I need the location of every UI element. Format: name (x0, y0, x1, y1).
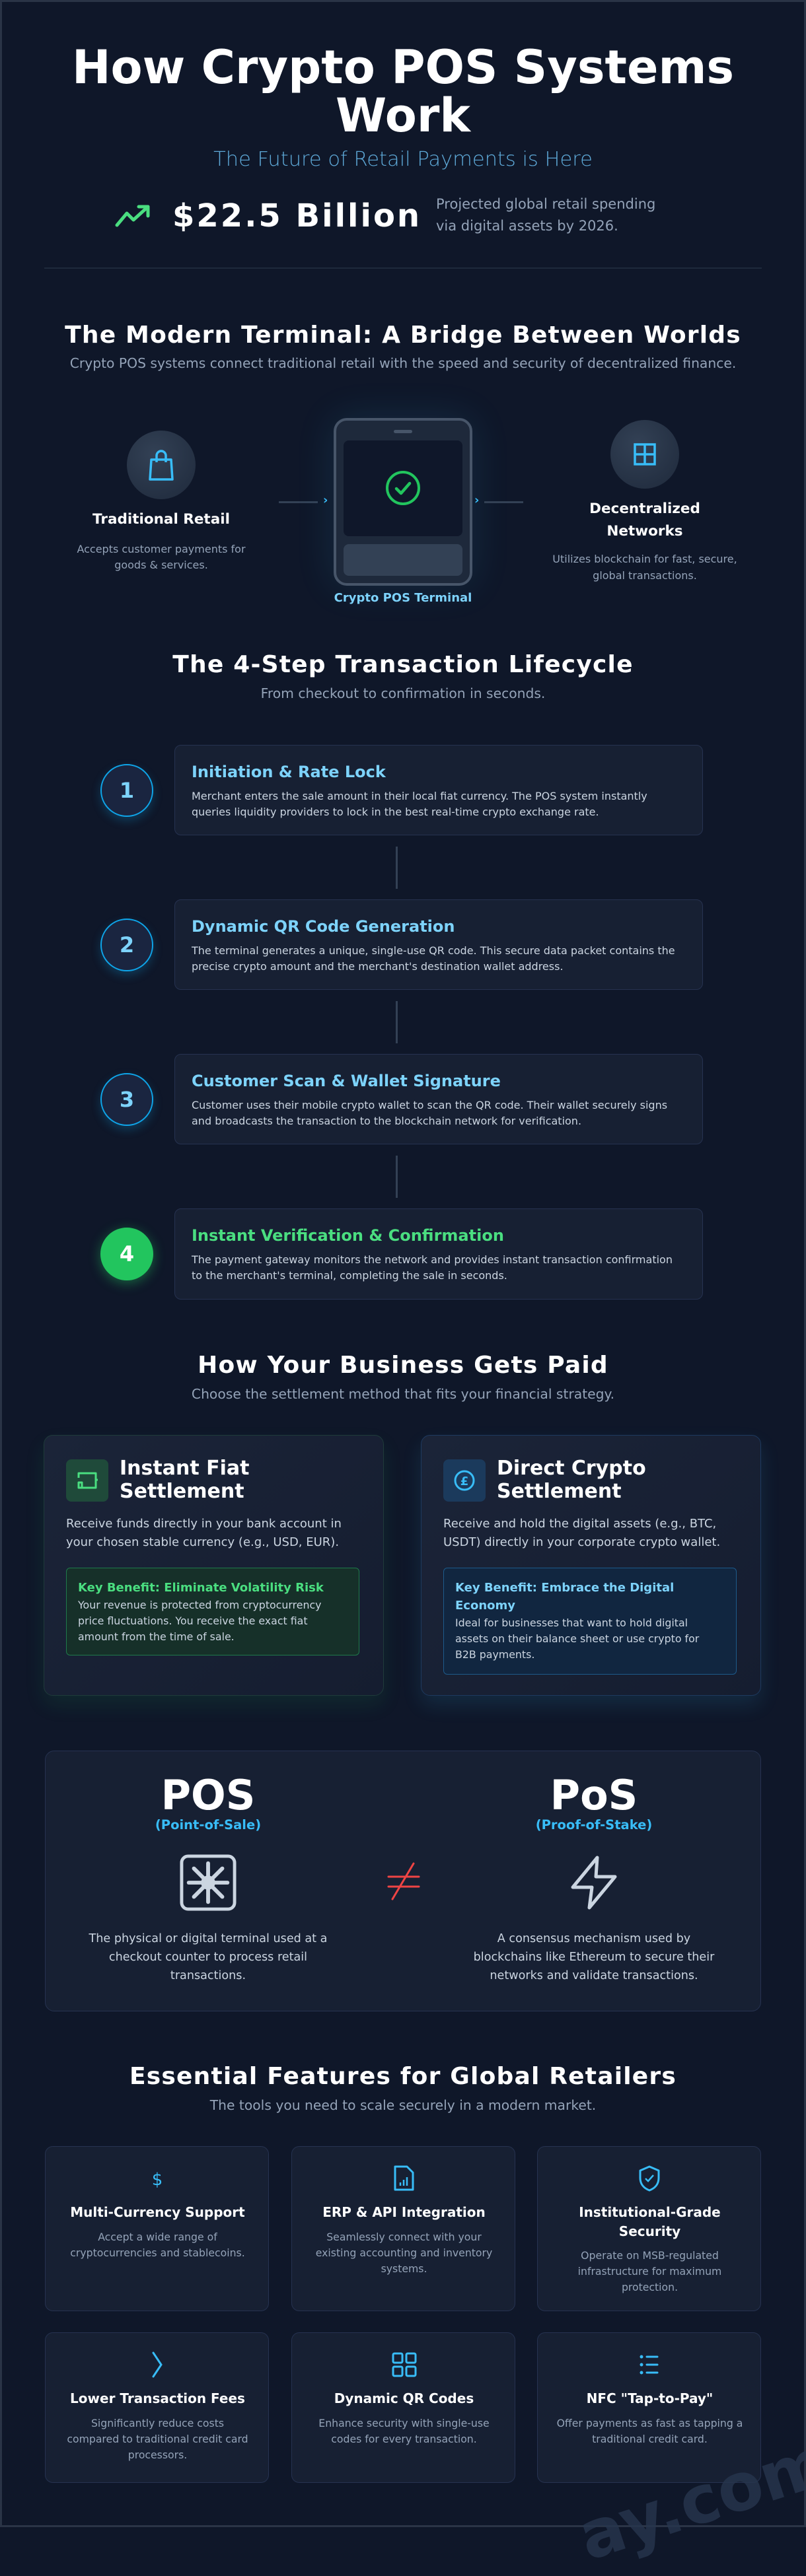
step card (174, 1054, 703, 1144)
description: Accepts customer payments for (77, 543, 246, 555)
heading: features: Essential Features for Global Retailers (129, 2063, 677, 2090)
PoS column: PoS (550, 1771, 638, 1819)
panel: POS vs PoS (45, 1751, 761, 2011)
panel: traditional retail (77, 431, 246, 571)
not equal sign (387, 1862, 420, 1900)
feature: multi-currency: Accept a wide range of cryptocurrencies and stablecoins. (70, 2231, 245, 2259)
stat description: via digital assets by 2026. (436, 218, 618, 234)
number badge: 1 (120, 778, 134, 803)
step card: Initiation & Rate Lock (192, 763, 386, 781)
label: Decentralized (589, 501, 700, 517)
description: global transactions. (593, 569, 697, 582)
card title: Instant Fiat (120, 1457, 249, 1480)
subheading: Crypto POS systems connect traditional retail with the speed and security of decentralized finance. (70, 355, 736, 371)
description: Utilizes blockchain for fast, secure, (552, 553, 737, 565)
feature: ERP & API: ERP & API Integration (322, 2204, 486, 2220)
feature: dynamic QR: Enhance security with single-use codes for every transaction. (318, 2417, 490, 2445)
key benefit (443, 1568, 737, 1675)
feature: NFC: Offer payments as fast as tapping a traditional credit card. (557, 2417, 743, 2445)
feature: multi-currency (45, 2146, 269, 2311)
subtitle: The Future of Retail Payments is Here (213, 148, 593, 171)
label (589, 501, 700, 540)
POS column: POS (161, 1771, 255, 1819)
key benefit (66, 1568, 359, 1655)
step card: Merchant enters the sale amount in their local fiat currency. The POS system instantly queries liquidity providers to lock in the best real-time crypto exchange rate. (192, 790, 647, 818)
PoS column: (Proof-of-Stake) (536, 1817, 652, 1832)
terminal label: Crypto POS Terminal (334, 591, 472, 605)
card title: Settlement (497, 1480, 622, 1503)
card text: Receive funds directly in your bank account in your chosen stable currency (e.g., USD, EUR). (66, 1517, 342, 1549)
panel: instant fiat settlement (44, 1435, 384, 1696)
feature: ERP & API (291, 2146, 515, 2311)
icon: lightning (571, 1856, 617, 1910)
feature: lower fees: Lower Transaction Fees (70, 2390, 245, 2406)
heading: modern terminal: The Modern Terminal: A Bridge Between Worlds (65, 322, 741, 349)
icon: pound coin (443, 1459, 486, 1502)
feature: security: Operate on MSB-regulated infrastructure for maximum protection. (578, 2249, 721, 2293)
screen (344, 440, 462, 536)
step 2 (96, 899, 703, 990)
step 1 (96, 745, 703, 835)
feature: security: Security (619, 2223, 680, 2239)
number badge (100, 919, 153, 971)
card title: Direct Crypto (497, 1457, 646, 1480)
panel: direct crypto settlement (421, 1435, 761, 1696)
stat description: Projected global retail spending (436, 196, 655, 212)
POS column: (Point-of-Sale) (155, 1817, 261, 1832)
step card (174, 899, 703, 990)
feature: dynamic QR: Dynamic QR Codes (334, 2390, 474, 2406)
subheading: The tools you need to scale securely in a modern market. (210, 2097, 596, 2113)
icon: pound coin: £ (460, 1475, 468, 1488)
step card: The terminal generates a unique, single-use QR code. This secure data packet contains the precise crypto amount and the merchant's destination wallet address. (192, 944, 675, 973)
POS column (89, 1771, 327, 1982)
number badge: 2 (120, 932, 134, 957)
subheading: Choose the settlement method that fits your financial strategy. (192, 1386, 614, 1402)
feature: NFC (537, 2332, 761, 2483)
card title (120, 1457, 249, 1503)
feature: dynamic QR (291, 2332, 515, 2483)
description (552, 553, 737, 582)
title: How Crypto POS Systems (72, 40, 734, 94)
feature: lower fees: Significantly reduce costs (91, 2417, 224, 2429)
feature: security: Institutional-Grade (579, 2204, 721, 2220)
number badge: 3 (120, 1087, 134, 1112)
icon: terminal chip (180, 1854, 237, 1911)
arrow: left connector: › (323, 493, 328, 507)
title (72, 40, 734, 143)
feature: security (537, 2146, 761, 2311)
POS column: The physical or digital terminal used at a checkout counter to process retail transactions. (89, 1932, 327, 1982)
title: Work (336, 88, 470, 143)
PoS column: A consensus mechanism used by blockchains like Ethereum to secure their networks and validate transactions. (474, 1932, 714, 1982)
step card (174, 745, 703, 835)
card title (497, 1457, 646, 1503)
description (77, 543, 246, 571)
step card: Instant Verification & Confirmation (192, 1226, 504, 1245)
label: Networks (606, 523, 683, 540)
key benefit: Key Benefit: Embrace the Digital Economy (455, 1581, 674, 1613)
feature: lower fees: processors. (128, 2449, 187, 2461)
stat description (436, 196, 655, 234)
key benefit: Your revenue is protected from cryptocurrency price fluctuations. You receive the exact fiat amount from the time of sale. (78, 1599, 322, 1643)
card text: Receive and hold the digital assets (e.g., BTC, USDT) directly in your corporate crypto wallet. (443, 1517, 720, 1549)
step card (174, 1208, 703, 1300)
icon: check (386, 471, 420, 505)
step card: Customer Scan & Wallet Signature (192, 1072, 501, 1090)
feature: multi-currency: Multi-Currency Support (70, 2204, 245, 2220)
label: Traditional Retail (92, 511, 230, 528)
icon: cash (66, 1459, 108, 1502)
PoS column (474, 1771, 715, 1982)
arrow: left connector (279, 493, 328, 507)
terminal device (326, 411, 480, 605)
step card: Customer uses their mobile crypto wallet to scan the QR code. Their wallet securely signs and broadcasts the transaction to the blockchain network for verification. (192, 1099, 667, 1127)
number badge (100, 764, 153, 817)
key benefit: Ideal for businesses that want to hold digital assets on their balance sheet or use crypto for B2B payments. (455, 1617, 699, 1661)
step 3 (96, 1054, 703, 1144)
number badge (100, 1228, 153, 1280)
feature: NFC: NFC "Tap-to-Pay" (587, 2390, 713, 2406)
feature: lower fees (45, 2332, 269, 2483)
feature: multi-currency: $ (152, 2170, 163, 2190)
icon: shopping bag (127, 431, 196, 499)
arrow: right connector (474, 493, 523, 507)
stat number: $22.5 Billion (172, 197, 421, 234)
stat row (115, 196, 655, 234)
step card: Dynamic QR Code Generation (192, 917, 455, 936)
step 4 (94, 1208, 703, 1300)
number badge: 4 (120, 1241, 134, 1267)
icon: blocks (610, 420, 679, 489)
arrow: right connector: › (474, 493, 479, 507)
subheading: From checkout to confirmation in seconds. (261, 685, 545, 701)
heading: business paid: How Your Business Gets Paid (198, 1352, 608, 1379)
step card: The payment gateway monitors the network and provides instant transaction confirmation to the merchant's terminal, completing the sale in seconds. (192, 1253, 673, 1282)
icon: trending up (115, 205, 149, 227)
heading: lifecycle: The 4-Step Transaction Lifecycle (172, 651, 634, 678)
feature: lower fees: compared to traditional credit card (67, 2433, 248, 2445)
card title: Settlement (120, 1480, 244, 1503)
key benefit: Key Benefit: Eliminate Volatility Risk (78, 1581, 324, 1595)
feature: ERP & API: Seamlessly connect with your existing accounting and inventory systems. (316, 2231, 492, 2275)
panel: decentralized networks (552, 420, 737, 582)
number badge (100, 1073, 153, 1126)
description: goods & services. (114, 559, 208, 571)
